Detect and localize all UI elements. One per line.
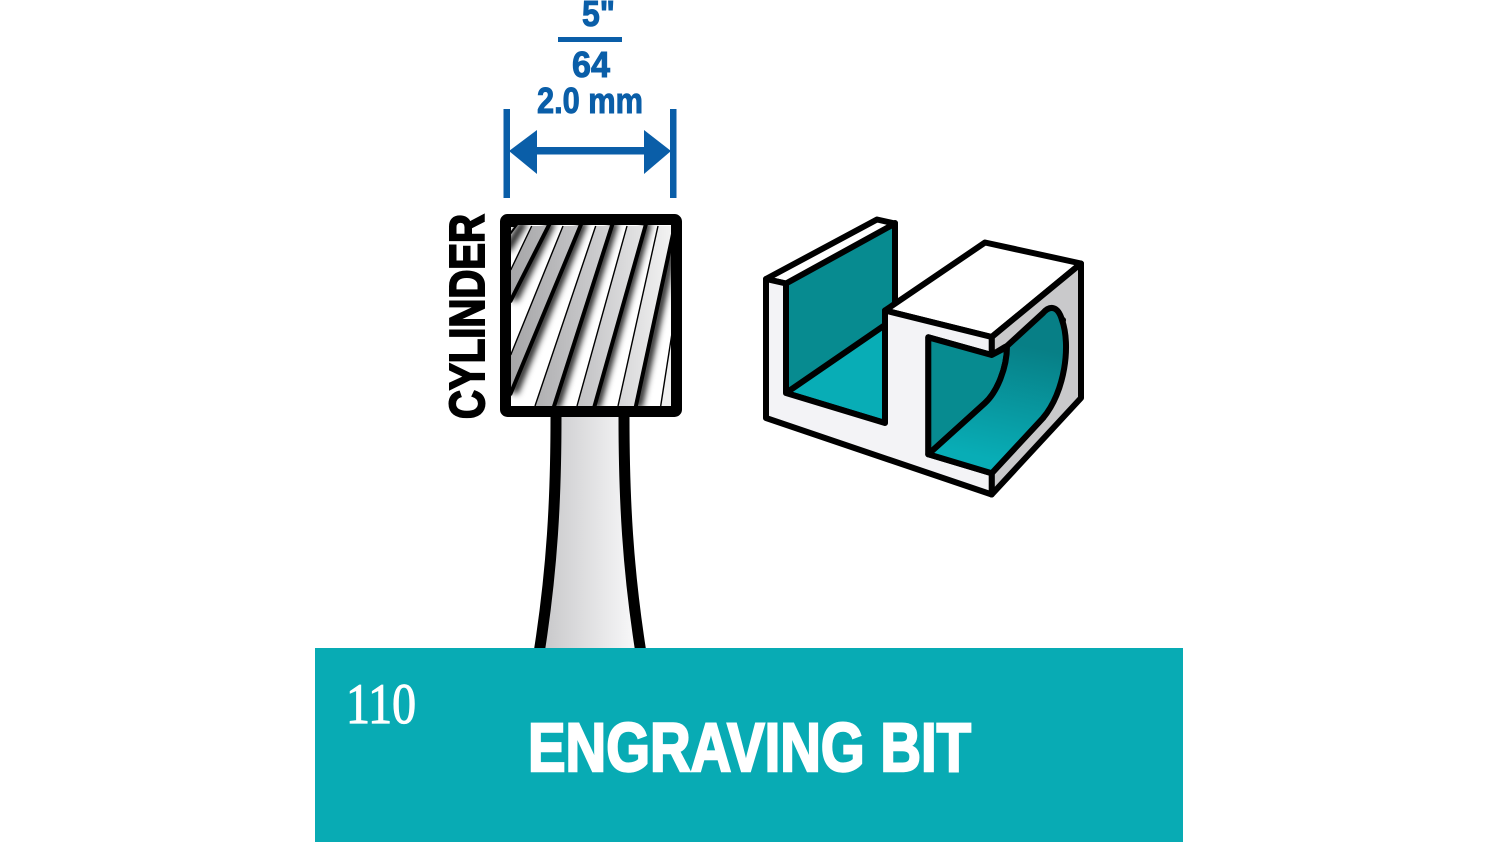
bit shank: [540, 417, 640, 650]
bit number: 110: [346, 673, 416, 736]
left wall back face: [786, 223, 895, 393]
notch curved surface: [928, 308, 1066, 473]
profile cut diagram: [766, 220, 1081, 494]
rotated label: CYLINDER: CYLINDER: [441, 214, 495, 419]
title banner: [315, 648, 1183, 842]
top face: [885, 242, 1081, 337]
dimension label: fraction and millimetres: [537, 0, 643, 121]
title: ENGRAVING BIT: [528, 709, 971, 786]
dimension label: fraction and millimetres: 64: [572, 44, 610, 85]
front face: [766, 279, 992, 494]
dimension arrow: [504, 109, 676, 198]
bit head with spiral flutes: [506, 220, 676, 412]
infographic canvas: [315, 0, 1183, 842]
right side face: [992, 264, 1081, 494]
channel floor: [786, 325, 885, 423]
notch back wall: [928, 337, 1007, 454]
dimension label: fraction and millimetres: 2.0 mm: [537, 80, 643, 121]
left wall top strip: [766, 220, 895, 284]
